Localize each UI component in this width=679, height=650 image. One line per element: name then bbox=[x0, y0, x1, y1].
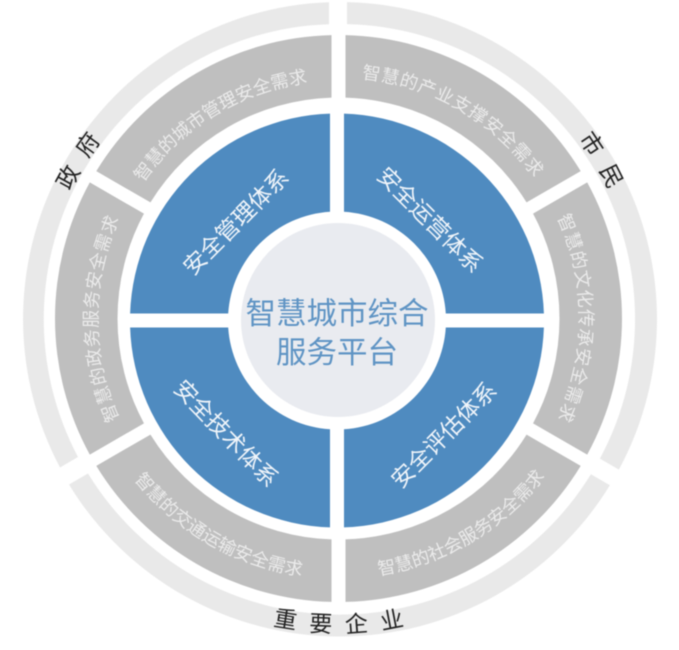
segment: social services requirement: 智慧的社会服务安全需求 bbox=[378, 470, 544, 576]
outer segment: key enterprises bbox=[70, 474, 610, 636]
quadrant: security assessment: 安全评估体系 bbox=[386, 377, 502, 493]
segment: transport requirement: 智慧的交通运输安全需求 bbox=[135, 472, 303, 576]
segment: city management requirement: 智慧的城市管理安全需求 bbox=[132, 68, 307, 181]
center hub: platform title: 智慧城市综合 bbox=[246, 297, 428, 331]
label: 重要企业: 重要企业 bbox=[273, 608, 404, 635]
segment: transport requirement bbox=[96, 434, 332, 602]
quadrant: security operations bbox=[344, 114, 544, 313]
segment: city management requirement bbox=[96, 34, 332, 202]
segment: government services requirement bbox=[54, 182, 144, 455]
segment: social services requirement bbox=[345, 434, 581, 602]
segment: government services requirement: 智慧的政务服务安全需求 bbox=[82, 215, 120, 423]
center hub: platform title: 服务平台 bbox=[276, 336, 398, 370]
quadrant: security technology: 安全技术体系 bbox=[169, 375, 283, 492]
inner ring: security systems bbox=[130, 114, 544, 527]
quadrant: security management bbox=[130, 114, 330, 313]
middle ring: security requirements bbox=[54, 34, 622, 602]
segment: culture heritage requirement: 智慧的文化传承安全需求 bbox=[557, 213, 595, 423]
quadrant: security management: 安全管理体系 bbox=[178, 164, 294, 280]
segment: culture heritage requirement bbox=[532, 182, 622, 455]
quadrant: security operations: 安全运营体系 bbox=[372, 162, 488, 278]
quadrant: security technology bbox=[130, 328, 330, 527]
center hub: platform title bbox=[241, 223, 435, 417]
label: 政府: 政府 bbox=[54, 130, 100, 190]
segment: industry support requirement bbox=[345, 34, 581, 202]
label: 市民: 市民 bbox=[580, 130, 624, 189]
quadrant: security assessment bbox=[344, 328, 544, 527]
segment: industry support requirement: 智慧的产业支撑安全需求 bbox=[364, 64, 544, 177]
